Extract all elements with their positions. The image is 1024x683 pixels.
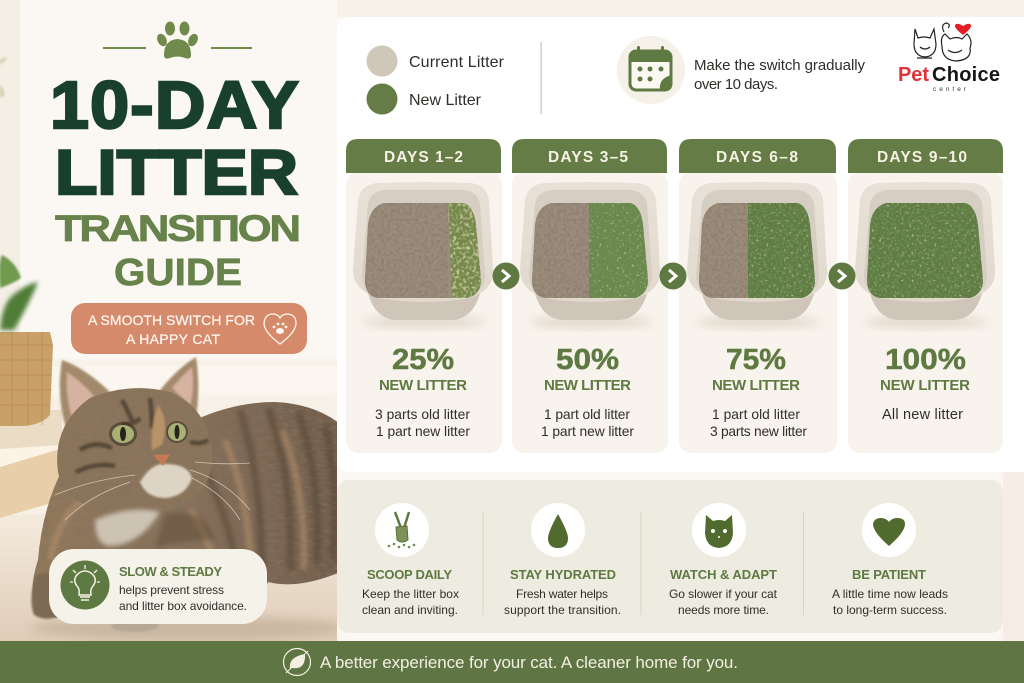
calendar note: over 10 days. [694, 76, 778, 93]
calendar note [694, 57, 866, 93]
card: days 1-2: NEW LITTER [379, 377, 467, 394]
arrow: days 3-5 to days 6-8 [660, 262, 686, 290]
card: days 3-5: 1 part old litter [544, 407, 630, 422]
tip: scoop daily: Keep the litter box [362, 587, 459, 601]
panel: main transition schedule [337, 17, 1024, 472]
card: days 6-8: DAYS 6–8 [716, 149, 798, 166]
logo: Pet Choice center [898, 23, 1000, 93]
background scene: plant, basket and shelf [0, 57, 337, 641]
tip: scoop daily: SCOOP DAILY [367, 567, 452, 582]
tagline pill: A HAPPY CAT [126, 331, 220, 347]
tip: stay hydrated [504, 503, 621, 617]
card: days 1-2: 25% [392, 344, 454, 376]
tip: be patient [832, 503, 948, 617]
title: 10-DAY [50, 67, 299, 143]
logo: Pet Choice center: Pet [898, 64, 929, 86]
icon: light bulb [60, 560, 110, 610]
callout: slow and steady [49, 549, 267, 624]
title: LITTER [55, 138, 298, 208]
tabby cat illustration [30, 357, 350, 640]
tip: be patient: to long-term success. [833, 603, 947, 617]
litter tray 25 percent [353, 182, 493, 328]
icon: leaf [284, 648, 310, 676]
card: days 3-5: 50% [556, 344, 619, 376]
callout: slow and steady: SLOW & STEADY [119, 564, 222, 579]
panel: tips [337, 480, 1003, 633]
calendar note: Make the switch gradually [694, 57, 866, 74]
card: days 3-5: NEW LITTER [544, 377, 631, 394]
logo: Pet Choice center: center [933, 86, 967, 93]
legend: New Litter [409, 92, 482, 109]
card: days 6-8: 75% [726, 343, 786, 376]
icon: calendar [617, 36, 685, 104]
tip: scoop daily: clean and inviting. [362, 603, 458, 617]
litter tray 100 percent [855, 182, 995, 328]
card: days 6-8 [679, 139, 837, 453]
decorative paw icon with rules [103, 22, 252, 59]
tip: scoop daily [362, 503, 459, 617]
footer banner [0, 641, 1024, 683]
litter tray 75 percent [687, 182, 827, 328]
card: days 1-2: DAYS 1–2 [384, 149, 463, 166]
card: days 9-10: NEW LITTER [880, 377, 970, 394]
legend: Current Litter [409, 54, 505, 71]
tip: stay hydrated: support the transition. [504, 603, 621, 617]
footer banner: A better experience for your cat. A cleaner home for you. [320, 653, 738, 672]
icon: heart with paw [264, 314, 296, 344]
title [50, 67, 301, 294]
litter tray 50 percent [520, 182, 660, 328]
card: days 3-5 [512, 139, 668, 453]
card: days 1-2: 3 parts old litter [375, 407, 470, 422]
card: days 9-10: 100% [885, 344, 966, 376]
title: GUIDE [114, 251, 242, 294]
tagline pill: A SMOOTH SWITCH FOR [88, 312, 255, 328]
title: TRANSITION [55, 207, 301, 249]
card: days 1-2 [346, 139, 502, 453]
tip: stay hydrated: Fresh water helps [516, 587, 608, 601]
arrow: days 6-8 to days 9-10 [828, 262, 856, 290]
card: days 3-5: 1 part new litter [541, 424, 634, 439]
card: days 6-8: 1 part old litter [712, 407, 800, 422]
card: days 9-10: DAYS 9–10 [877, 149, 967, 166]
card: days 3-5: DAYS 3–5 [548, 149, 628, 166]
card: days 6-8: 3 parts new litter [710, 424, 807, 439]
tip: watch and adapt: WATCH & ADAPT [670, 567, 777, 582]
card: days 9-10 [848, 139, 1003, 453]
tip: be patient: A little time now leads [832, 587, 948, 601]
tip: stay hydrated: STAY HYDRATED [510, 567, 616, 582]
tip: watch and adapt: needs more time. [678, 603, 769, 617]
tip: watch and adapt [669, 503, 778, 617]
callout: slow and steady: helps prevent stress [119, 583, 224, 597]
arrow: days 1-2 to days 3-5 [492, 262, 520, 290]
logo: Pet Choice center: Choice [932, 64, 1000, 86]
tagline pill [71, 303, 307, 354]
card: days 9-10: All new litter [882, 407, 963, 423]
legend [366, 46, 505, 114]
tip: watch and adapt: Go slower if your cat [669, 587, 778, 601]
callout: slow and steady: and litter box avoidance. [119, 599, 247, 613]
card: days 1-2: 1 part new litter [376, 424, 470, 439]
tip: be patient: BE PATIENT [852, 567, 926, 582]
card: days 6-8: NEW LITTER [712, 377, 800, 394]
